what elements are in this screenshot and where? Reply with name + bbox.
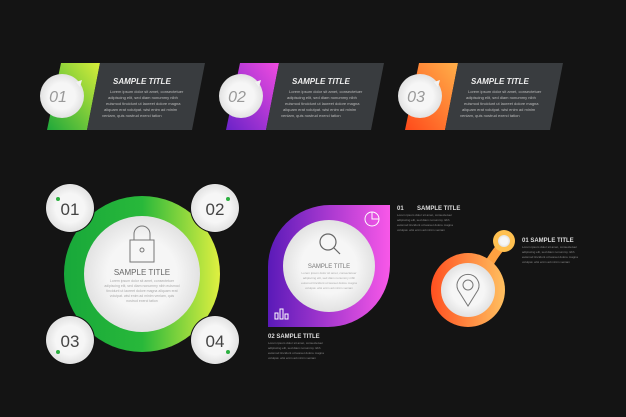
green ring diagram: tincidunt ut laoreet dolore magna aliquam erat [106,289,178,293]
green ring diagram: 04 [206,332,224,351]
orange pin diagram [431,230,515,327]
purple leaf diagram [268,205,390,327]
green ring diagram: 01 [61,200,79,219]
banner 3: adipiscing elit, sed diam nonummy nibh [466,95,536,100]
banner 2: 02 [228,89,246,106]
green ring diagram: volutpat. wisi enim ad minim veniam, quis [110,294,174,298]
text: purple 02: volutpat. wisi enim ad minim veniam [268,356,317,360]
green ring diagram: adipiscing elit, sed diam nonummy nibh euismod [104,284,180,288]
green ring diagram: 03 [61,332,79,351]
purple leaf diagram: euismod tincidunt ut laoreet dolore magna [301,281,357,285]
banner 2 [219,63,384,130]
text: orange 01 [522,238,578,264]
text: purple 02: adipiscing elit, sed diam nonummy nibh [268,346,321,350]
text: purple 01: SAMPLE TITLE [417,206,460,212]
green ring diagram: SAMPLE TITLE [114,268,170,277]
banner 1: Lorem ipsum dolor sit amet, consectetuer [110,89,184,94]
banner 3: veniam, quis nostrud exerci tation [460,113,520,118]
text: orange 01: adipiscing elit, sed diam nonummy nibh [522,250,575,254]
banner 1: SAMPLE TITLE [113,77,171,86]
text: purple 02: Lorem ipsum dolor sit amet, consectetuer [268,341,323,345]
green ring diagram [45,183,240,365]
text: purple 02 [268,334,324,360]
text: orange 01: 01 SAMPLE TITLE [522,238,574,244]
text: purple 02: 02 SAMPLE TITLE [268,334,320,340]
banner 1: euismod tincidunt ut laoreet dolore magna [106,101,181,106]
banner 3: 03 [407,89,425,106]
text: purple 01 [397,206,460,232]
text: purple 01: 01 [397,206,404,212]
purple leaf diagram: Lorem ipsum dolor sit amet, consectetuer [301,271,357,275]
text: purple 02: euismod tincidunt ut laoreet dolore magna [268,351,324,355]
banner 1: adipiscing elit, sed diam nonummy nibh [108,95,178,100]
purple leaf diagram: SAMPLE TITLE [308,264,350,270]
banner 1: 01 [49,89,67,106]
banner 2: adipiscing elit, sed diam nonummy nibh [287,95,357,100]
text: purple 01: adipiscing elit, sed diam nonummy nibh [397,218,450,222]
banner 1: veniam, quis nostrud exerci tation [102,113,162,118]
text: orange 01: Lorem ipsum dolor sit amet, consectetuer [522,245,577,249]
banner 3: SAMPLE TITLE [471,77,529,86]
banner 1: aliquam erat volutpat. wisi enim ad minim [104,107,178,112]
icon: magnifier [320,234,340,254]
purple leaf diagram: adipiscing elit, sed diam nonummy nibh [303,276,356,280]
banner 3 [398,63,563,130]
text: orange 01: euismod tincidunt ut laoreet dolore magna [522,255,578,259]
green ring diagram: 02 [206,200,224,219]
banner 2: veniam, quis nostrud exerci tation [281,113,341,118]
text: purple 01: volutpat. wisi enim ad minim veniam [397,228,446,232]
banner 3: aliquam erat volutpat. wisi enim ad minim [462,107,536,112]
text: purple 01: euismod tincidunt ut laoreet dolore magna [397,223,453,227]
purple leaf diagram: volutpat. wisi enim ad minim veniam [305,286,354,290]
banner 2: SAMPLE TITLE [292,77,350,86]
green ring diagram: nostrud exerci tation [126,299,158,303]
banner 3: Lorem ipsum dolor sit amet, consectetuer [468,89,542,94]
banner 2: Lorem ipsum dolor sit amet, consectetuer [289,89,363,94]
banner 1 [40,63,205,130]
icon: location pin [457,274,479,306]
banner 2: aliquam erat volutpat. wisi enim ad minim [283,107,357,112]
banner 2: euismod tincidunt ut laoreet dolore magna [285,101,360,106]
green ring diagram: Lorem ipsum dolor sit amet, consectetuer [110,279,175,283]
icon: lock [130,226,154,262]
banner 3: euismod tincidunt ut laoreet dolore magna [464,101,539,106]
text: orange 01: volutpat. wisi enim ad minim veniam [522,260,571,264]
text: purple 01: Lorem ipsum dolor sit amet, consectetuer [397,213,452,217]
